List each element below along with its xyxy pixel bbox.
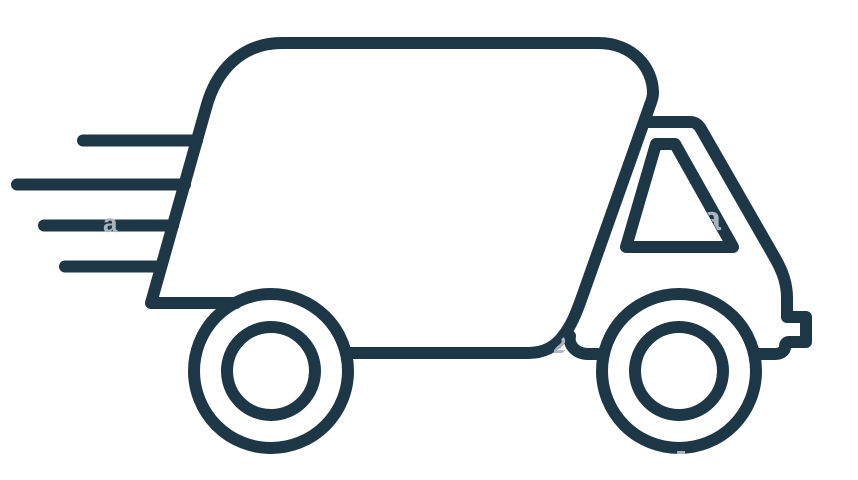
watermark fragments: 2	[553, 332, 566, 359]
watermark fragments	[103, 200, 722, 454]
cab window	[626, 144, 733, 247]
rear wheel	[194, 294, 348, 448]
cargo box	[151, 43, 653, 353]
speed lines	[17, 140, 197, 266]
cab body	[570, 122, 806, 354]
watermark fragments: a	[103, 208, 118, 238]
watermark fragments: a	[702, 200, 722, 238]
front wheel	[602, 294, 756, 448]
